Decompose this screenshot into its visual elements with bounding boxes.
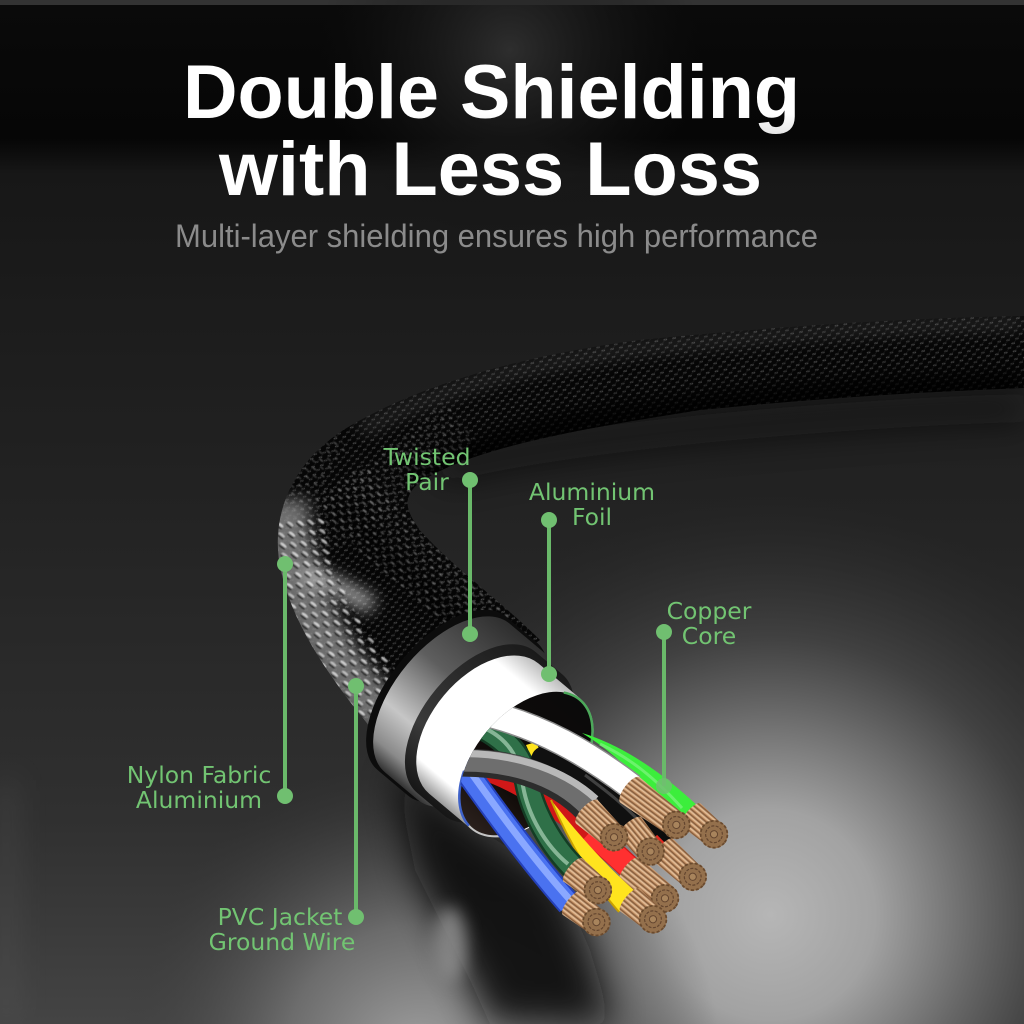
white aluminium foil xyxy=(389,630,620,863)
wire: yellow xyxy=(526,742,673,940)
dark ring xyxy=(377,618,602,849)
wire: dark green xyxy=(480,720,612,904)
wire: black front xyxy=(545,760,671,872)
foil opening xyxy=(433,667,619,861)
label: Copper Core: Core xyxy=(682,622,736,650)
label: Twisted Pair: Twisted xyxy=(382,443,471,471)
label: Twisted Pair xyxy=(382,443,478,642)
wire: bright green xyxy=(582,733,734,855)
label: Copper Core xyxy=(656,597,752,794)
cylindrical shield layers xyxy=(338,583,630,874)
label: Copper Core: Copper xyxy=(667,597,752,625)
title xyxy=(183,50,800,212)
label: Aluminium Foil: Aluminium xyxy=(529,478,655,506)
braided nylon cable body xyxy=(278,316,1024,724)
label: Aluminium Foil xyxy=(529,478,655,682)
label: PVC Jacket Ground Wire xyxy=(209,678,364,956)
label: Nylon Fabric Aluminium: Nylon Fabric xyxy=(127,761,271,789)
title: Double Shielding xyxy=(183,50,800,135)
cable illustration xyxy=(260,300,1024,943)
label: PVC Jacket Ground Wire: PVC Jacket xyxy=(218,903,342,931)
grey PVC jacket xyxy=(345,590,582,833)
subtitle: Multi-layer shielding ensures high performance xyxy=(175,218,818,254)
wire: black rear xyxy=(610,788,707,892)
wire: blue xyxy=(460,756,611,936)
label: Nylon Fabric Aluminium: Aluminium xyxy=(136,786,262,814)
label: Nylon Fabric Aluminium xyxy=(127,556,293,814)
label: Twisted Pair: Pair xyxy=(405,468,449,496)
wire: grey xyxy=(462,749,628,852)
title: with Less Loss xyxy=(218,127,762,212)
wires bundle xyxy=(450,712,734,943)
wire: red xyxy=(495,772,686,920)
black outer collar xyxy=(338,583,576,829)
label: Aluminium Foil: Foil xyxy=(572,503,612,531)
wire: white xyxy=(480,712,697,846)
label: PVC Jacket Ground Wire: Ground Wire xyxy=(209,928,355,956)
